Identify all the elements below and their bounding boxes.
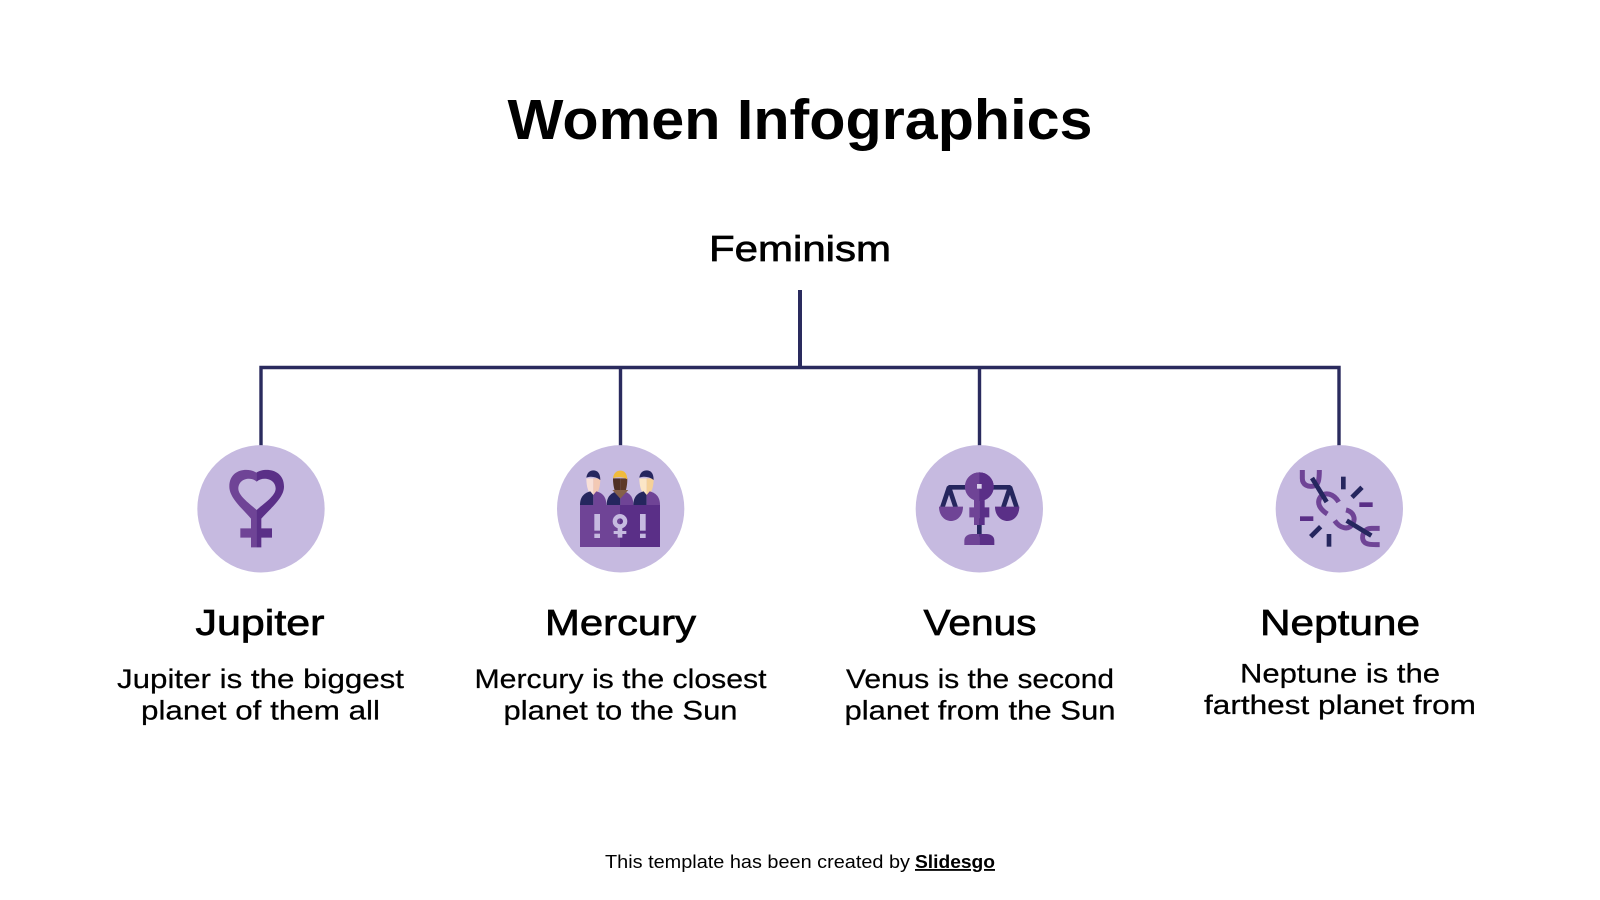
heading: Venus: Venus <box>924 602 1036 643</box>
description: Venus <box>844 664 1116 726</box>
description: Neptune <box>1204 658 1476 720</box>
heading: Neptune: Neptune <box>1260 602 1420 643</box>
description: Venus: Venus is the second <box>846 664 1114 694</box>
footer credit: This template has been created by <box>605 851 911 872</box>
panel: Neptune <box>1204 445 1476 720</box>
description: Jupiter: Jupiter is the biggest <box>117 664 405 694</box>
description: Mercury <box>474 664 767 726</box>
heading: Jupiter: Jupiter <box>196 602 325 643</box>
description: Mercury: planet to the Sun <box>504 696 738 726</box>
tree connector lines <box>261 290 1339 447</box>
panel: Venus <box>844 445 1116 726</box>
icon: broken chain <box>1276 445 1403 572</box>
panel: Mercury <box>474 445 767 726</box>
description: Venus: planet from the Sun <box>844 696 1116 726</box>
description: Neptune: Neptune is the <box>1240 658 1440 688</box>
description: Jupiter <box>117 664 405 726</box>
title: Women Infographics <box>508 88 1092 152</box>
heading: Mercury: Mercury <box>545 602 696 643</box>
description: Mercury: Mercury is the closest <box>474 664 767 694</box>
icon: heart female symbol <box>197 445 325 572</box>
description: Jupiter: planet of them all <box>141 696 380 726</box>
icon: scales of justice <box>916 445 1043 572</box>
description: Neptune: farthest planet from <box>1204 690 1476 720</box>
panel: Jupiter <box>117 445 405 726</box>
root label: Feminism: Feminism <box>709 228 891 269</box>
icon: protesters with banner <box>557 445 684 572</box>
footer credit: Slidesgo <box>915 851 995 872</box>
